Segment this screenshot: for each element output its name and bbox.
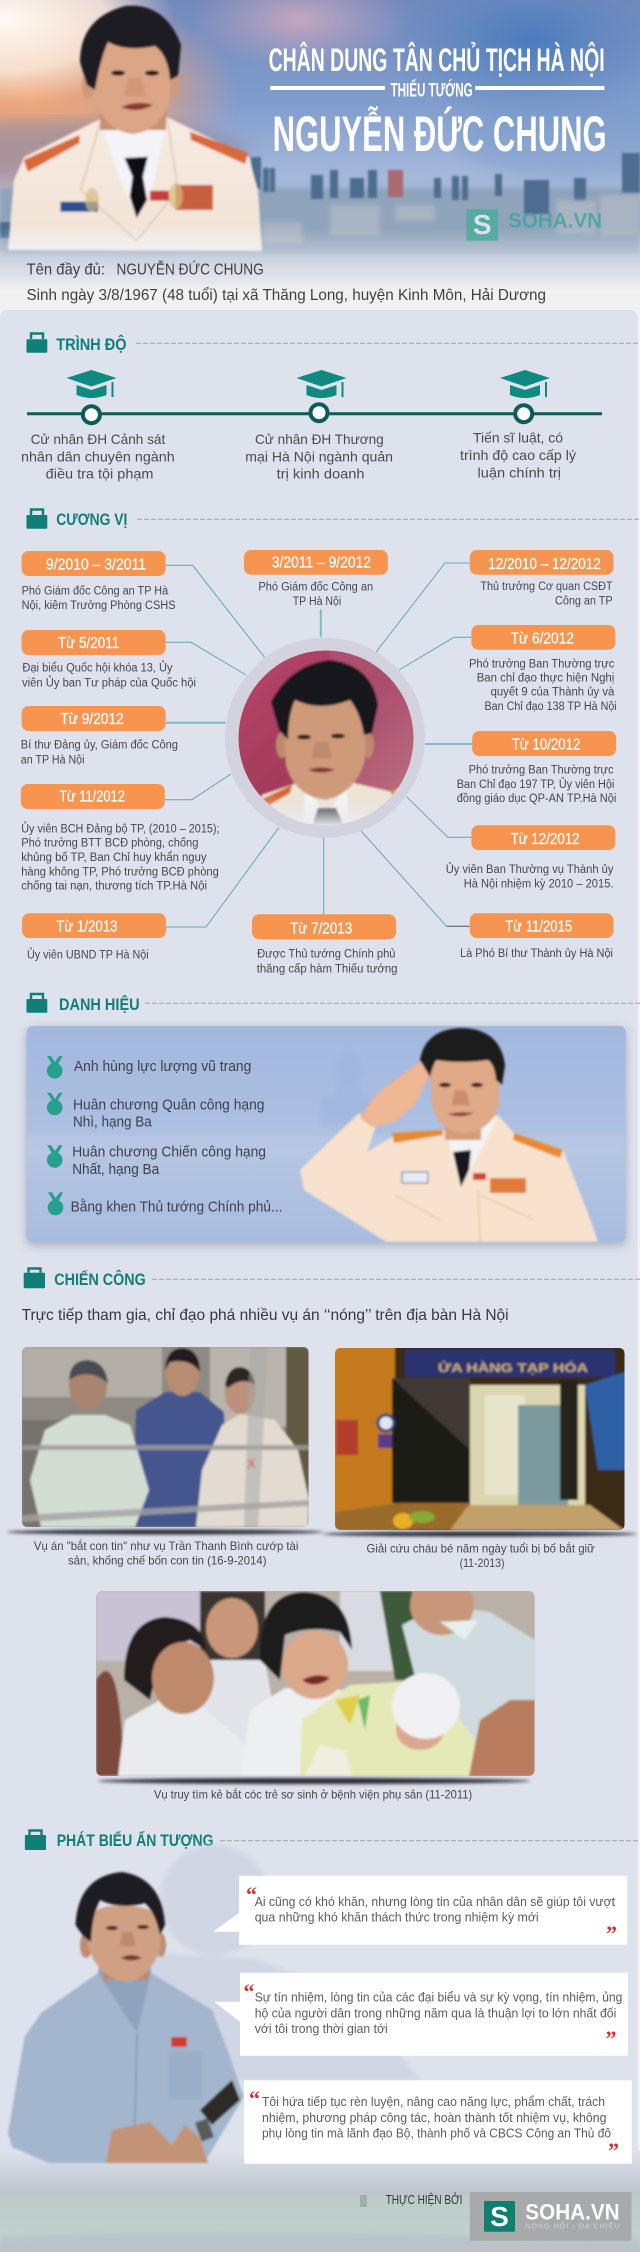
milestone: Từ 11/2015 (460, 913, 614, 960)
awards list (71, 1059, 282, 1216)
awards list: Huân chương Quân công hạng (73, 1097, 264, 1113)
logo: SOHA.VN infographic: S (473, 209, 492, 240)
icon: medal 3 (47, 1145, 62, 1168)
milestone: 3/2011 – 9/2012 (244, 550, 388, 608)
milestone: Từ 7/2013: Được Thủ tướng Chính phủ (257, 949, 396, 961)
quote box 3: ” (608, 2138, 619, 2163)
footer logo: SOHA.VN: NÓNG HỔI - ĐA CHIỀU (525, 2221, 620, 2231)
section heading: CHIẾN CÔNG: CHIẾN CÔNG (54, 1270, 146, 1289)
education timeline (21, 370, 602, 482)
full name and birth info: Sinh ngày 3/8/1967 (48 tuổi) tại xã Thăng Long, huyện Kinh Môn, Hải Dương (26, 286, 546, 304)
quote box 1: qua những khó khăn thách thức trong nhiệm kỳ mới (255, 1910, 539, 1925)
education 2 text: trị kinh doanh (277, 466, 364, 482)
section heading: DANH HIỆU: DANH HIỆU (59, 995, 140, 1014)
milestone: Từ 1/2013: Từ 1/2013 (56, 919, 118, 936)
awards list: Nhì, hạng Ba (73, 1115, 153, 1131)
milestone: Từ 9/2012: Bí thư Đảng ủy, Giám đốc Công (21, 740, 178, 752)
title line 2: THIẾU TƯỚNG (391, 78, 473, 102)
education 2 text (245, 431, 393, 482)
awards list: Huân chương Chiến công hạng (72, 1145, 266, 1161)
milestone: Từ 9/2012: Từ 9/2012 (60, 711, 124, 728)
caption: photo A (34, 1538, 298, 1568)
full name and birth info: Tên đầy đủ: (26, 261, 105, 278)
icon: medal 2 (47, 1093, 62, 1115)
milestone: Từ 6/2012: quyết 9 của Thành ủy và (491, 687, 615, 699)
quote box 1: “ (246, 1882, 257, 1907)
logo: SOHA.VN infographic (466, 209, 602, 241)
education 1 text (21, 431, 175, 482)
milestone: 9/2010 – 3/2011: Nội, kiêm Trưởng Phòng CSHS (22, 600, 176, 612)
education 1 text: điều tra tội phạm (46, 466, 154, 482)
milestone: 9/2010 – 3/2011: 9/2010 – 3/2011 (46, 556, 146, 573)
education 1 text: Cử nhân ĐH Cảnh sát (31, 431, 165, 447)
milestone: 12/2010 – 12/2012 (470, 550, 614, 607)
milestone: 12/2010 – 12/2012: Công an TP (555, 595, 613, 607)
milestone: Từ 1/2013 (22, 913, 166, 961)
milestone: Từ 11/2015: Là Phó Bí thư Thành ủy Hà Nội (460, 948, 613, 960)
caption: photo A: sản, khống chế bốn con tin (16-9-2014) (68, 1554, 266, 1568)
quote box 2: “ (244, 1979, 254, 2004)
icon: medal 1 (47, 1056, 62, 1079)
milestone: Từ 5/2011: Đại biểu Quốc hội khóa 13, Ủy (22, 662, 173, 675)
section heading: CƯƠNG VỊ (26, 510, 640, 529)
quote box 3: phụ lòng tin mà lãnh đạo Bộ, thành phố và CBCS Công an Thủ đô (262, 2125, 611, 2140)
milestone: Từ 9/2012: an TP Hà Nội (21, 754, 84, 766)
footer lake background (0, 2150, 640, 2252)
red x mark: X (247, 1456, 256, 1471)
quote box 2: hộ của người dân trong những năm qua là thuận lợi to lớn nhất đối (255, 2005, 616, 2020)
photo B: grocery store (323, 1346, 637, 1536)
credit: THỰC HIỆN BỞI: THỰC HIỆN BỞI (386, 2192, 462, 2207)
icon: graduation cap 1 (66, 370, 116, 398)
section heading: TRÌNH ĐỘ: TRÌNH ĐỘ (56, 335, 127, 354)
full name and birth info: NGUYỄN ĐỨC CHUNG (116, 259, 264, 278)
quote box 3: nhiệm, phương pháp công tác, hoàn thành tốt nhiệm vụ, không (262, 2110, 606, 2125)
title (269, 40, 607, 162)
milestone: 3/2011 – 9/2012: 3/2011 – 9/2012 (272, 555, 371, 572)
quote box 2: với tôi trong thời gian tới (255, 2021, 388, 2036)
milestone: Từ 11/2012: khủng bố TP, Ban Chỉ huy khẩn nguy (21, 852, 207, 864)
photo C: newborn rescue (94, 1575, 537, 1784)
section heading: PHÁT BIỂU ẤN TƯỢNG: PHÁT BIỂU ẤN TƯỢNG (57, 1831, 214, 1850)
quote box 3: Tôi hứa tiếp tục rèn luyện, nâng cao năng lực, phẩm chất, trách (262, 2094, 605, 2109)
milestone: Từ 11/2012: Từ 11/2012 (59, 788, 125, 805)
education 3 text (460, 430, 576, 480)
milestone: Từ 6/2012 (469, 625, 617, 713)
footer logo: SOHA.VN: SOHA.VN (525, 2199, 620, 2224)
intro text: Trực tiếp tham gia, chỉ đạo phá nhiều vụ án ‘‘nóng’’ trên địa bàn Hà Nội (22, 1307, 509, 1324)
quote box 1: ” (606, 1921, 617, 1946)
footer logo: SOHA.VN (470, 2192, 631, 2241)
milestone: Từ 1/2013: Ủy viên UBND TP Hà Nội (27, 948, 149, 961)
milestone: 9/2010 – 3/2011: Phó Giám đốc Công an TP Hà (22, 585, 169, 597)
faded background portrait (80, 1845, 420, 2080)
milestone: Từ 7/2013: Từ 7/2013 (290, 920, 352, 937)
education 3 text: Tiến sĩ luật, có (473, 430, 563, 446)
milestone: Từ 6/2012: Từ 6/2012 (511, 631, 574, 648)
caption: photo B: (11-2013) (460, 1556, 505, 1570)
education 2 text: mại Hà Nội ngành quản (245, 448, 393, 464)
icon: medal 4 (48, 1192, 63, 1215)
education 3 text: luận chính trị (478, 464, 561, 480)
quote box 3: “ (249, 2086, 260, 2111)
quote box 2 (214, 1973, 628, 2056)
milestone: Từ 11/2015: Từ 11/2015 (505, 919, 572, 936)
milestone: Từ 12/2012: Từ 12/2012 (511, 831, 580, 848)
quote box 1: Ai cũng có khó khăn, nhưng lòng tin của nhân dân sẽ giúp tôi vượt (255, 1894, 615, 1909)
connector lines (165, 563, 472, 927)
quote box 3 (244, 2080, 632, 2164)
milestone: Từ 12/2012 (446, 825, 615, 890)
panel: awards (26, 1026, 626, 1242)
milestone: Từ 11/2012: Phó trưởng BTT BCĐ phòng, chống (21, 838, 198, 850)
logo: SOHA.VN infographic: SOHA.VN (508, 210, 602, 233)
milestone: 9/2010 – 3/2011 (22, 551, 176, 612)
awards list: Nhất, hạng Ba (72, 1162, 160, 1178)
milestone: Từ 11/2012 (21, 784, 220, 892)
photo A: hostage case (7, 1345, 323, 1534)
milestone: Từ 10/2012 (457, 731, 616, 805)
caption: photo B: Giải cứu cháu bé năm ngày tuổi bị bố bắt giữ (366, 1540, 595, 1555)
milestone: 12/2010 – 12/2012: Thủ trưởng Cơ quan CSĐT (480, 581, 613, 593)
milestone: 12/2010 – 12/2012: 12/2010 – 12/2012 (488, 556, 601, 573)
caption: photo A: Vụ án "bắt con tin" như vụ Trần Thanh Bình cướp tài (34, 1538, 298, 1553)
caption: photo C: Vụ truy tìm kẻ bắt cóc trẻ sơ sinh ở bệnh viện phụ sản (11-2011) (154, 1786, 472, 1801)
milestone: Từ 11/2012: hàng không TP, Phó trưởng BCĐ phòng (21, 866, 219, 878)
icon: graduation cap 3 (500, 370, 550, 398)
full name and birth info (26, 259, 546, 304)
milestone: 3/2011 – 9/2012: TP Hà Nội (293, 596, 341, 608)
section heading: CƯƠNG VỊ: CƯƠNG VỊ (56, 511, 127, 529)
milestone: Từ 9/2012 (21, 706, 178, 766)
milestone: Từ 10/2012: Phó trưởng Ban Thường trực (469, 765, 614, 777)
section heading: CHIẾN CÔNG (24, 1268, 640, 1289)
education 3 text: trình độ cao cấp lý (460, 447, 576, 463)
milestone: Từ 10/2012: Ban Chỉ đạo 197 TP, Ủy viên Hội (457, 778, 614, 791)
milestone: Từ 12/2012: Hà Nội nhiệm kỳ 2010 – 2015. (464, 878, 614, 890)
awards list: Anh hùng lực lượng vũ trang (74, 1059, 251, 1075)
portrait: officer in white uniform (8, 6, 262, 251)
icon: graduation cap 2 (296, 370, 346, 398)
saluting officer photo (300, 1028, 598, 1242)
awards list: Bằng khen Thủ tướng Chính phủ... (71, 1199, 282, 1216)
milestone: Từ 10/2012: Từ 10/2012 (512, 737, 580, 754)
caption: photo B (366, 1540, 595, 1570)
footer logo: SOHA.VN: S (490, 2201, 509, 2232)
header banner: sky and skyline (0, 0, 640, 292)
central portrait circle (225, 638, 425, 838)
quote box 2: ” (606, 2026, 616, 2051)
milestone: Từ 6/2012: Phó trưởng Ban Thường trực (469, 658, 615, 670)
milestone: Từ 5/2011: viên Ủy ban Tư pháp của Quốc hội (22, 676, 196, 689)
milestone: Từ 5/2011: Từ 5/2011 (58, 635, 119, 652)
milestone: Từ 6/2012: Ban Chỉ đạo 138 TP Hà Nội (484, 701, 617, 713)
milestone: Từ 7/2013 (252, 914, 398, 975)
section heading: DANH HIỆU (26, 994, 640, 1014)
section heading: PHÁT BIỂU ẤN TƯỢNG (25, 1830, 640, 1850)
logo: SOHA.VN infographic: INFOGRAPHIC (529, 234, 586, 241)
milestone: 3/2011 – 9/2012: Phó Giám đốc Công an (258, 581, 373, 593)
milestone: Từ 10/2012: đồng giáo dục QP-AN TP.Hà Nội (457, 793, 616, 805)
education 2 text: Cử nhân ĐH Thương (255, 431, 384, 447)
milestone: Từ 12/2012: Ủy viên Ban Thường vụ Thành ủy (446, 863, 614, 876)
quote box 2: Sự tín nhiệm, lòng tin của các đại biểu và sự kỳ vọng, tín nhiệm, ủng (255, 1990, 622, 2005)
quote box 1 (213, 1876, 627, 1946)
milestone: Từ 11/2012: Ủy viên BCH Đảng bộ TP, (2010 – 2015); (21, 823, 220, 836)
speaker photo: man in blue shirt (8, 1872, 244, 2163)
milestone: Từ 5/2011 (22, 630, 196, 689)
education 1 text: nhân dân chuyên ngành (21, 448, 175, 464)
photo B: grocery store: ỬA HÀNG TẠP HÓA (438, 1360, 588, 1375)
milestone: Từ 7/2013: thăng cấp hàm Thiếu tướng (257, 963, 398, 975)
section heading: TRÌNH ĐỘ (26, 334, 640, 354)
milestone: Từ 6/2012: Ban chỉ đạo thực hiện Nghị (477, 673, 614, 685)
milestone: Từ 11/2012: chống tai nạn, thương tích TP.Hà Nội (21, 880, 207, 892)
